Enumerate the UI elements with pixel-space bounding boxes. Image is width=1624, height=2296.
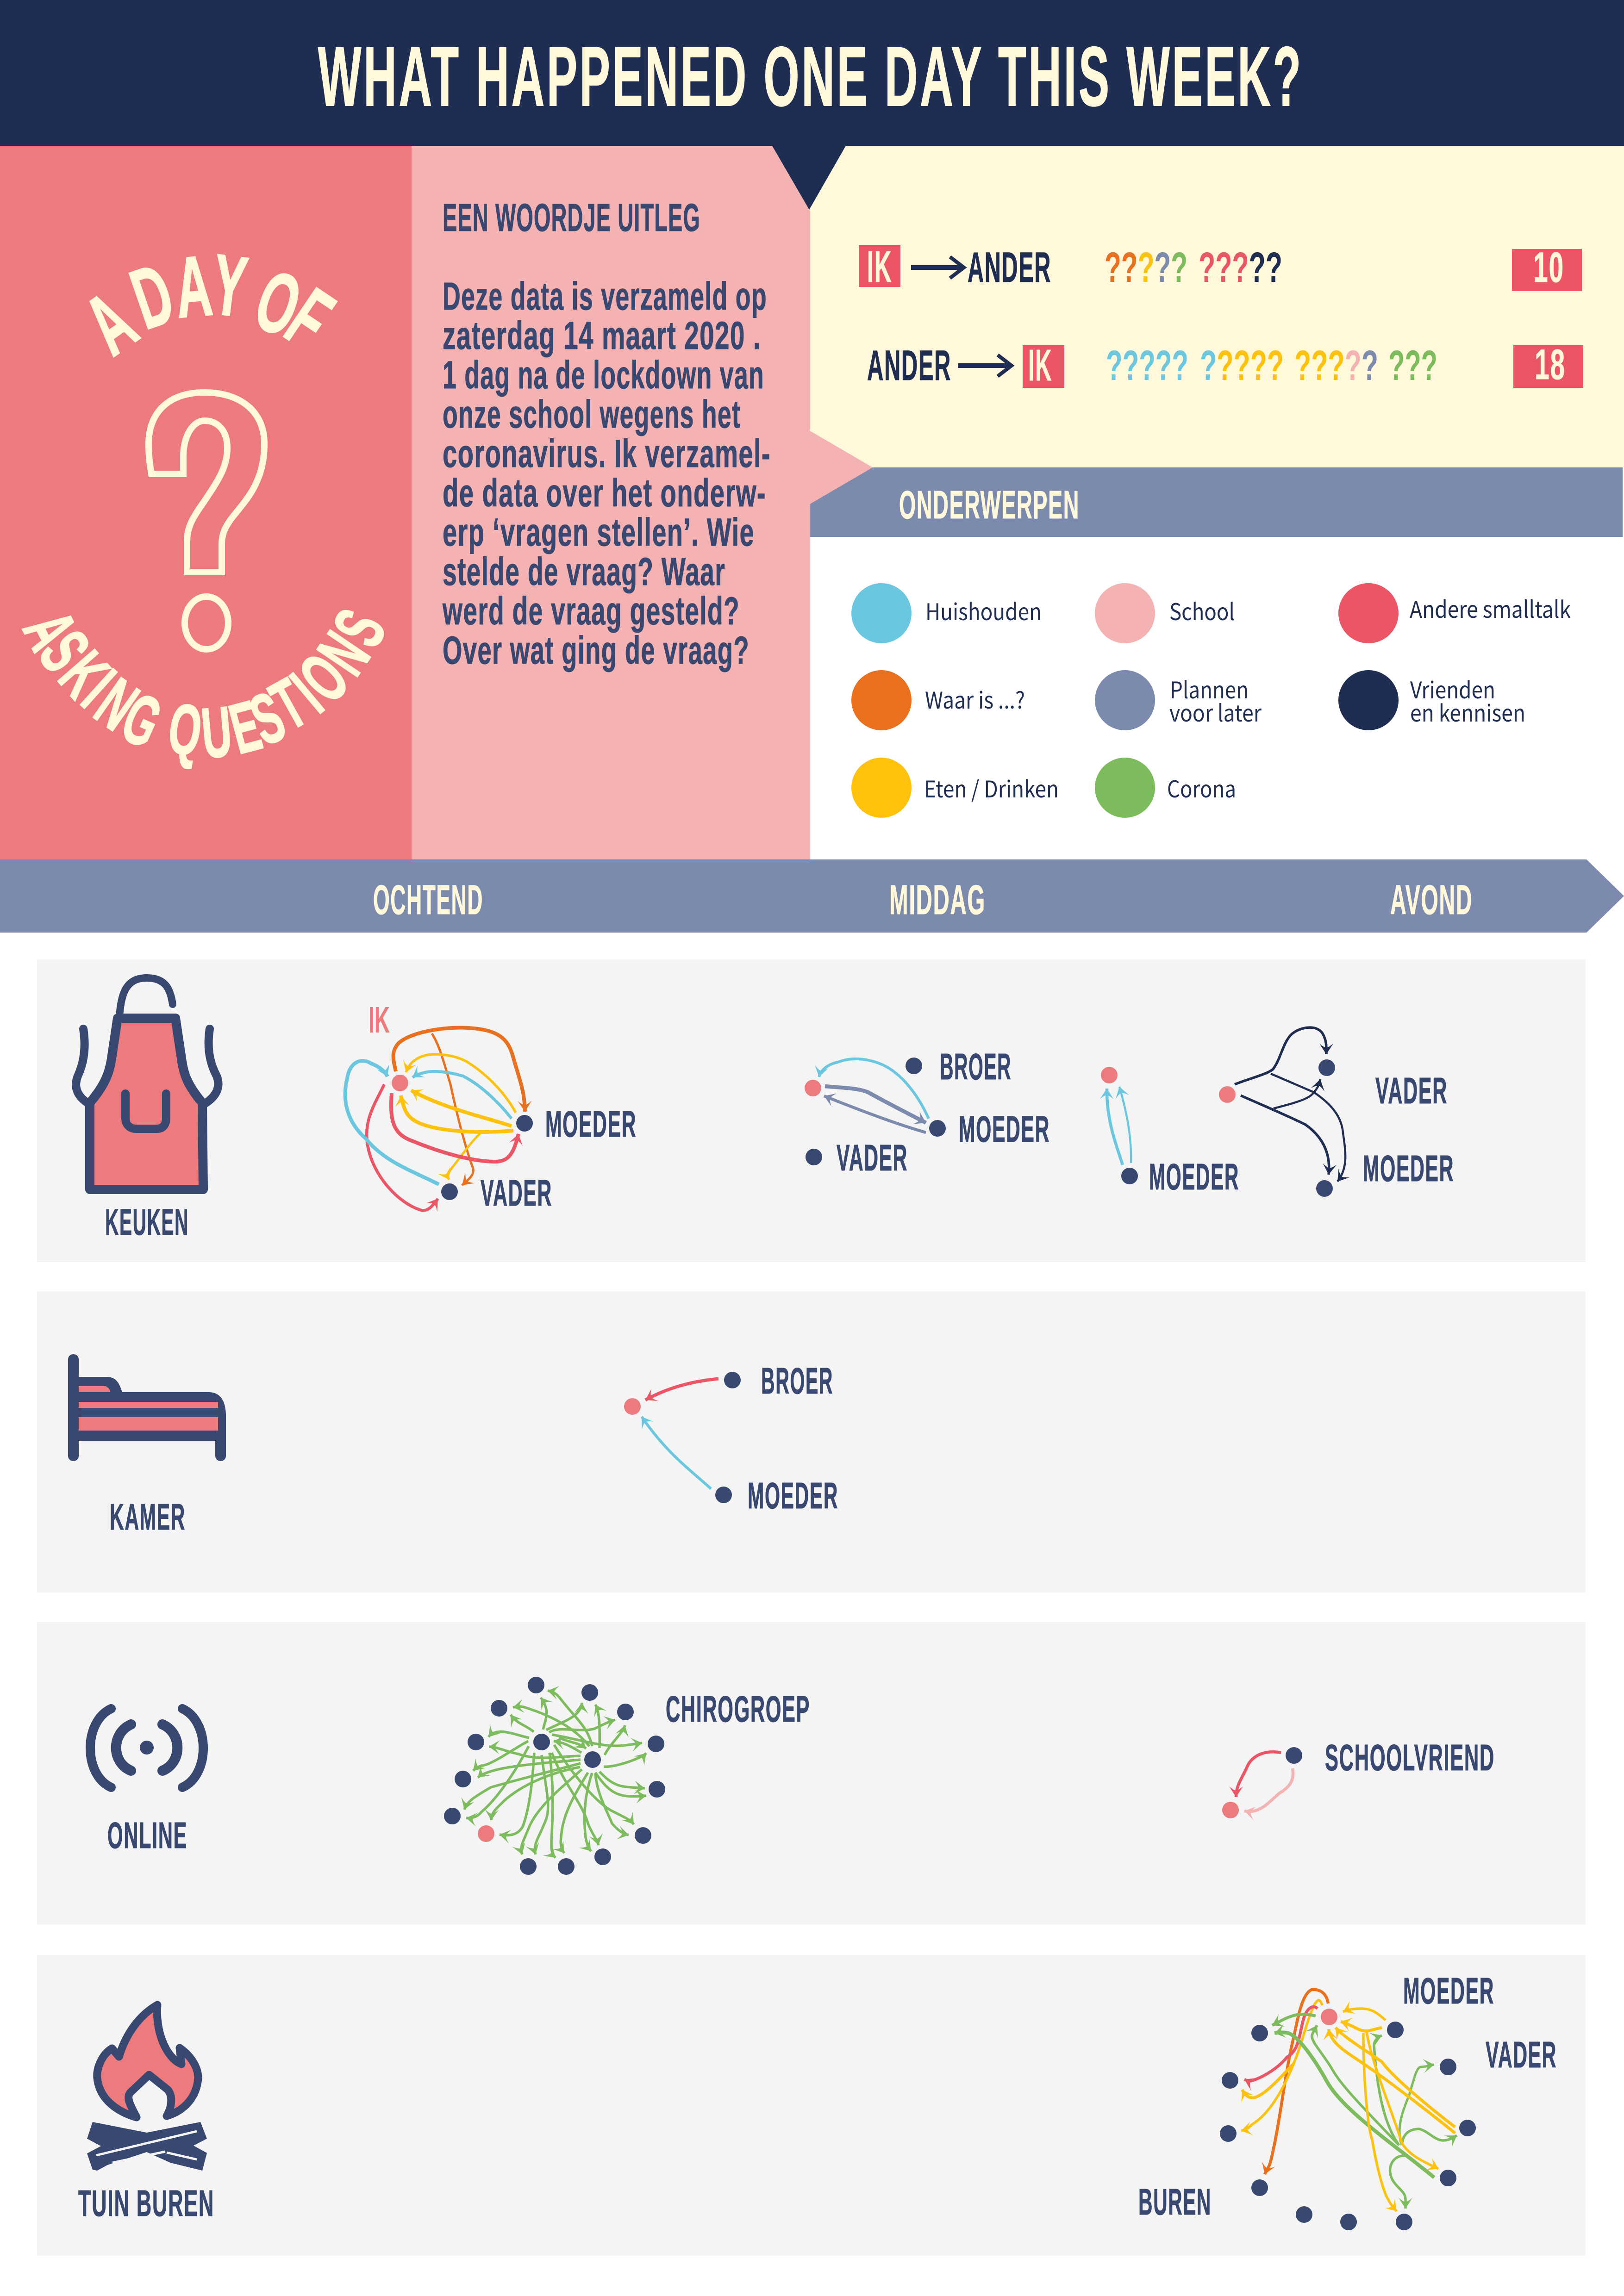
label: online: ONLINE	[107, 1815, 187, 1856]
legend: topic swatches and names: en kennisen	[1410, 695, 1525, 728]
explanation heading: EEN WOORDJE UITLEG	[443, 196, 700, 239]
panel: online	[37, 1622, 1586, 1924]
legend: topic swatches and names: voor later	[1169, 695, 1262, 728]
timeline arrow: MIDDAG	[889, 877, 986, 923]
nodes: morning kitchen	[392, 1075, 533, 1200]
curved heading: ASKING QUESTIONS: I	[277, 659, 337, 727]
curved heading: A DAY OF: Y	[207, 236, 252, 336]
curved heading: A DAY OF: D	[120, 246, 185, 348]
legend: topic swatches and names	[851, 583, 1571, 818]
network: chirogroep	[444, 1677, 810, 1875]
explanation paragraph: de data over het onderw-	[443, 471, 766, 515]
panel: coral intro with question mark	[0, 146, 412, 860]
network: room	[624, 1360, 838, 1516]
row: IK to ANDER: ANDER	[968, 244, 1051, 291]
row: ANDER to IK: IK	[1028, 341, 1052, 390]
row: ANDER to IK: 18	[1535, 341, 1566, 388]
title banner	[0, 0, 1624, 146]
row: ANDER to IK: ?????	[1200, 342, 1284, 389]
network: evening kitchen	[1219, 1027, 1454, 1197]
curved heading: A DAY OF	[69, 236, 349, 373]
row: IK to ANDER: IK	[867, 242, 892, 292]
pink pointer triangle	[809, 430, 873, 504]
labels: garden: VADER	[1486, 2034, 1557, 2075]
curved heading: ASKING QUESTIONS: K	[44, 637, 124, 711]
label: keuken: KEUKEN	[105, 1201, 189, 1243]
navy pointer triangle	[772, 146, 846, 210]
row: ANDER to IK: ???	[1388, 342, 1437, 389]
nodes: garden	[1220, 2009, 1476, 2230]
arrows: chirogroep	[464, 1691, 646, 1858]
labels: garden	[1138, 1970, 1557, 2222]
legend: topic swatches and names: Eten / Drinken	[924, 771, 1059, 804]
icon: campfire	[87, 2005, 207, 2171]
network: morning kitchen questions	[345, 999, 637, 1213]
timeline arrow: AVOND	[1390, 877, 1473, 923]
icon: broadcast waves	[90, 1709, 203, 1787]
panel: keuken	[37, 959, 1586, 1262]
labels: garden: BUREN	[1138, 2181, 1212, 2222]
arrows: garden	[1241, 1990, 1457, 2211]
curved heading: A DAY OF: F	[270, 271, 349, 367]
labels: morning kitchen	[369, 999, 637, 1213]
network: garden neighbours	[1138, 1970, 1557, 2230]
icon: apron	[76, 978, 219, 1189]
labels: morning kitchen: VADER	[481, 1172, 552, 1213]
timeline arrow: OCHTEND	[373, 877, 483, 923]
curved heading: A DAY OF: A	[69, 274, 153, 373]
curved heading: ASKING QUESTIONS: U	[199, 691, 235, 773]
legend: topic swatches and names: Andere smalltalk	[1410, 591, 1571, 625]
labels: morning kitchen: IK	[369, 999, 390, 1040]
network: midday kitchen brother father mother: BROER	[940, 1046, 1012, 1087]
row: ANDER to IK: ANDER	[867, 342, 951, 389]
curved heading: ASKING QUESTIONS: Q	[164, 688, 206, 771]
curved heading: ASKING QUESTIONS	[8, 597, 401, 773]
row: IK to ANDER: 10	[1533, 244, 1564, 291]
row: ANDER to IK: ?????	[1294, 342, 1378, 389]
row: ANDER to IK: ?????	[1106, 342, 1188, 389]
icon: bed	[68, 1354, 226, 1461]
legend header bar: ONDERWERPEN	[899, 483, 1080, 527]
legend: topic swatches and names: Plannen	[1170, 672, 1249, 705]
legend: topic swatches and names: School	[1169, 594, 1235, 627]
network: evening kitchen: VADER	[1375, 1070, 1448, 1111]
explanation paragraph: Over wat ging de vraag?	[443, 628, 750, 672]
nodes: chirogroep	[444, 1677, 665, 1875]
row: IK to ANDER: ?????	[1199, 244, 1282, 291]
panel: tuin buren	[37, 1955, 1586, 2256]
explanation paragraph: onze school wegens het	[443, 392, 741, 436]
explanation paragraph: 1 dag na de lockdown van	[443, 353, 764, 397]
network: room: MOEDER	[748, 1475, 838, 1516]
explanation paragraph: zaterdag 14 maart 2020 .	[443, 314, 761, 357]
explanation paragraph: erp ‘vragen stellen’. Wie	[443, 510, 755, 554]
panel: explanation text	[412, 146, 810, 860]
network: midday kitchen brother father mother	[805, 1046, 1050, 1178]
curved heading: ASKING QUESTIONS: A	[8, 599, 92, 661]
network: midday kitchen brother father mother: VADER	[837, 1137, 908, 1178]
timeline arrow	[0, 859, 1624, 933]
curved heading: ASKING QUESTIONS: S	[24, 617, 105, 684]
explanation paragraph	[442, 274, 771, 672]
network: schoolvriend	[1222, 1737, 1495, 1818]
explanation paragraph: Deze data is verzameld op	[443, 274, 767, 318]
curved heading: ASKING QUESTIONS: N	[303, 619, 385, 688]
curved heading: ASKING QUESTIONS: O	[284, 639, 364, 716]
network: room: BROER	[761, 1360, 833, 1401]
explanation paragraph: werd de vraag gesteld?	[442, 589, 740, 633]
row: IK to ANDER	[859, 242, 1582, 292]
panel: legend onderwerpen	[810, 467, 1624, 859]
panel: kamer	[37, 1291, 1586, 1593]
explanation paragraph: coronavirus. Ik verzamel-	[443, 432, 771, 475]
curved heading: ASKING QUESTIONS: N	[82, 663, 152, 745]
labels: morning kitchen: MOEDER	[545, 1103, 637, 1145]
network: midday kitchen mother	[1101, 1067, 1239, 1197]
panel: question counts	[810, 146, 1624, 467]
curved heading: ASKING QUESTIONS: S	[240, 677, 295, 760]
curved heading: A DAY OF: A	[171, 238, 216, 336]
legend: topic swatches and names: Huishouden	[925, 594, 1042, 627]
label: tuin buren: TUIN BUREN	[78, 2183, 214, 2224]
legend header bar	[810, 467, 1623, 537]
curved heading: ASKING QUESTIONS: I	[68, 655, 130, 722]
icon: outlined question mark	[149, 392, 264, 649]
legend: topic swatches and names: Vrienden	[1410, 672, 1495, 705]
legend: topic swatches and names: Corona	[1167, 771, 1236, 804]
curved heading: ASKING QUESTIONS: S	[318, 597, 401, 658]
curved heading: ASKING QUESTIONS: T	[258, 663, 319, 745]
label: kamer: KAMER	[110, 1496, 186, 1537]
curved heading: ASKING QUESTIONS: G	[111, 678, 173, 763]
labels: garden: MOEDER	[1403, 1970, 1494, 2011]
row: ANDER to IK	[867, 341, 1583, 390]
curved heading: ASKING QUESTIONS: E	[222, 685, 269, 769]
curved heading: A DAY OF: O	[244, 252, 312, 355]
network: midday kitchen brother father mother: MOEDER	[959, 1108, 1050, 1150]
row: IK to ANDER: ?????	[1105, 244, 1187, 291]
explanation paragraph: stelde de vraag? Waar	[443, 550, 725, 593]
label: chirogroep: CHIROGROEP	[666, 1688, 810, 1730]
network: evening kitchen: MOEDER	[1363, 1148, 1454, 1189]
network: midday kitchen mother: MOEDER	[1149, 1156, 1239, 1197]
legend: topic swatches and names: Waar is ...?	[925, 682, 1025, 716]
arrows: morning kitchen	[345, 1028, 525, 1210]
